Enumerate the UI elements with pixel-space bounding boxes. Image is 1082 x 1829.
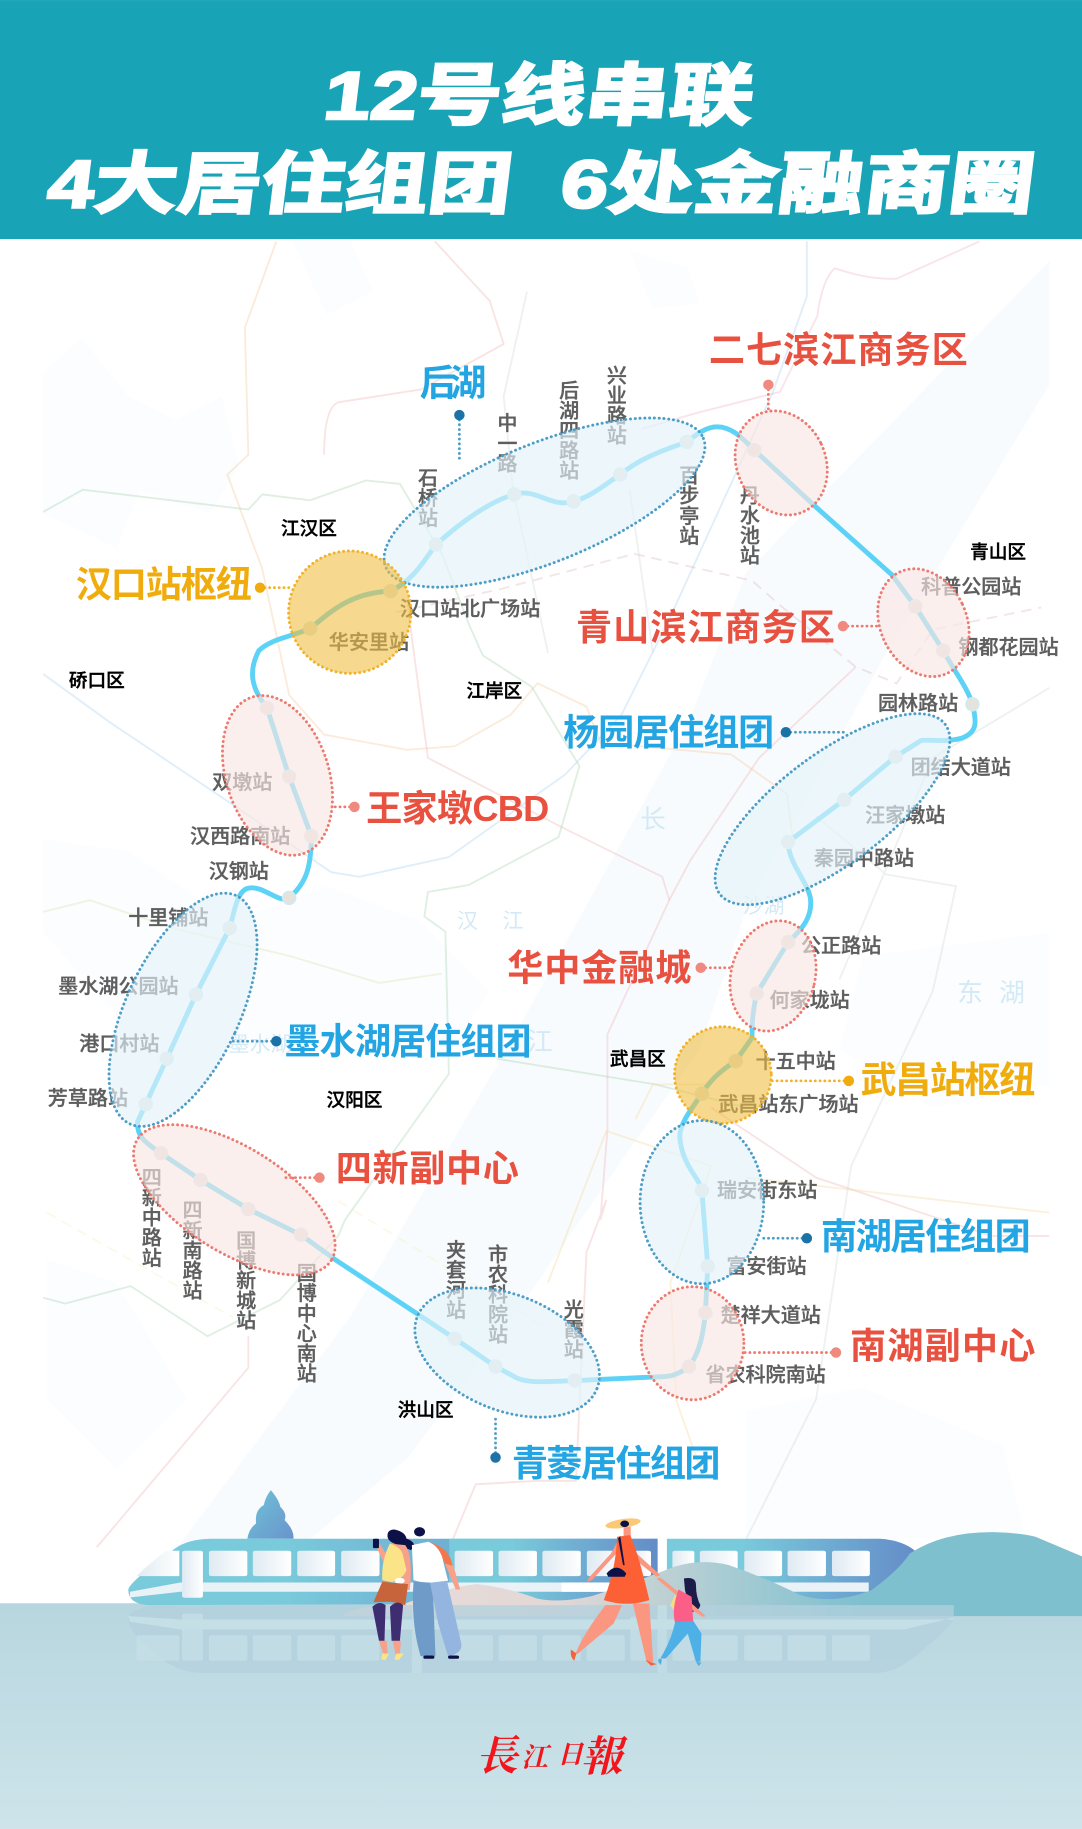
station names: 兴业路站 — [603, 364, 626, 445]
river and lake labels: 江 — [527, 1028, 553, 1057]
station names: 汪家墩站 — [865, 804, 945, 827]
station names: 后湖四路站 — [556, 380, 579, 480]
station names: 四新南路站 — [179, 1200, 202, 1300]
district names: 武昌区 — [610, 1049, 666, 1070]
callout labels: 王家墩CBD — [366, 788, 549, 829]
station names: 芳草路站 — [48, 1087, 128, 1110]
river and lake labels: 东 — [957, 979, 983, 1008]
river and lake labels: 墨水湖 — [229, 1034, 291, 1057]
station names: 武昌站东广场站 — [718, 1093, 859, 1116]
station names: 华安里站 — [329, 631, 409, 654]
background: faint base map — [0, 239, 1082, 1603]
station names: 秦园中路站 — [814, 847, 914, 870]
river and lake labels — [229, 805, 1025, 1057]
zone: Nanhu sub-centre — [641, 1287, 744, 1400]
station names — [48, 364, 1059, 1386]
zone: Sixin sub-centre — [110, 1095, 359, 1305]
callout labels: 青山滨江商务区 — [576, 607, 835, 648]
zone: Qingshan riverside business district — [861, 554, 986, 692]
zone: Houhu — [363, 383, 726, 622]
zone: Moshui Lake — [78, 872, 288, 1148]
station names: 四新中路站 — [138, 1167, 161, 1267]
person: man with bag — [412, 1527, 461, 1659]
station names: 夹套河站 — [443, 1239, 466, 1319]
river and lake labels: 湖 — [999, 980, 1025, 1008]
station names: 园林路站 — [878, 692, 958, 715]
header banner — [0, 0, 1082, 239]
station names: 十五中站 — [756, 1050, 836, 1073]
callout labels: 二七滨江商务区 — [709, 330, 968, 371]
station names: 汉钢站 — [209, 860, 269, 883]
station names: 石桥站 — [415, 467, 438, 528]
district names: 硚口区 — [69, 670, 125, 691]
station names: 港口村站 — [79, 1032, 159, 1055]
callout labels: 华中金融城 — [507, 948, 691, 989]
station names: 丹水池站 — [736, 485, 759, 565]
person: girl — [656, 1577, 706, 1666]
district names: 汉阳区 — [326, 1090, 382, 1111]
station names: 瑞安街东站 — [717, 1179, 817, 1202]
stations — [139, 436, 979, 1387]
station names: 科普公园站 — [921, 575, 1021, 598]
zone: Yangyuan — [687, 681, 978, 938]
leader dots — [255, 380, 854, 1463]
zone: Wangjiadun CBD — [203, 681, 352, 870]
callout labels: 南湖副中心 — [850, 1325, 1035, 1366]
person: woman in orange dress — [571, 1516, 660, 1666]
station names: 富安街站 — [726, 1255, 807, 1278]
river and lake labels: 江 — [503, 910, 524, 933]
train reflection — [128, 1605, 954, 1673]
zone: Qingling — [396, 1263, 619, 1442]
station names: 楚祥大道站 — [721, 1304, 821, 1327]
callout labels: 汉口站枢纽 — [76, 564, 252, 605]
callout labels: 武昌站枢纽 — [860, 1060, 1035, 1101]
title — [44, 59, 1039, 223]
station names: 墨水湖公园站 — [58, 975, 179, 998]
district names — [69, 518, 1026, 1421]
callout labels: 杨园居住组团 — [563, 712, 774, 753]
station names: 国博新城站 — [233, 1230, 256, 1330]
callout labels: 四新副中心 — [336, 1148, 519, 1189]
station names: 省农科院南站 — [705, 1363, 826, 1386]
river and lake labels: 汉 — [457, 910, 478, 933]
illustration: train, hills and passengers — [128, 1490, 1082, 1673]
metro line 12 — [137, 427, 975, 1382]
person: woman with phone — [372, 1529, 414, 1660]
zones: residential clusters, finance districts, hubs — [78, 383, 986, 1442]
station names: 中一路 — [494, 412, 517, 473]
callout labels: 青菱居住组团 — [512, 1443, 721, 1484]
zone: Nanhu — [640, 1121, 764, 1284]
district names: 洪山区 — [398, 1400, 454, 1421]
zone: Erqi riverside business district — [718, 396, 844, 530]
hills — [342, 1532, 1082, 1616]
station names: 汉西路南站 — [190, 825, 290, 848]
river and lake labels: 长 — [640, 805, 666, 834]
leader lines — [230, 385, 877, 1457]
station names: 钢都花园站 — [958, 636, 1059, 659]
train — [128, 1539, 918, 1605]
station names: 百步亭站 — [676, 465, 699, 545]
logo: Changjiang Daily: 江 — [519, 1736, 556, 1774]
station names: 汉口站北广场站 — [400, 597, 540, 620]
title: 4大居住组团 — [44, 148, 517, 223]
district names: 江岸区 — [466, 680, 522, 701]
callout labels: 南湖居住组团 — [821, 1216, 1031, 1257]
zone: Wuchang station hub — [675, 1027, 771, 1123]
station names: 何家垅站 — [770, 989, 850, 1012]
station names: 市农科院站 — [485, 1244, 508, 1344]
station names: 双墩站 — [212, 771, 272, 794]
district names: 江汉区 — [281, 518, 337, 539]
station names: 国博中心南站 — [293, 1263, 316, 1383]
zone: Hankou station hub — [289, 551, 411, 673]
callout labels: 后湖 — [420, 362, 486, 403]
logo: Changjiang Daily: 長 — [473, 1723, 529, 1783]
station names: 公正路站 — [801, 934, 881, 957]
title: 6处金融商圈 — [557, 148, 1039, 223]
water ground — [0, 1603, 1082, 1829]
station names: 光霞站 — [560, 1298, 583, 1359]
callout labels: 墨水湖居住组团 — [284, 1021, 532, 1062]
district names: 青山区 — [970, 542, 1026, 563]
station names: 十里铺站 — [128, 906, 208, 929]
river and lake labels: 沙湖 — [743, 895, 785, 918]
logo: Changjiang Daily — [473, 1723, 634, 1784]
station names: 团结大道站 — [911, 756, 1011, 779]
title: 12号线串联 — [320, 59, 758, 134]
zone: Central China finance city — [718, 911, 828, 1041]
logo: Changjiang Daily: 報 — [577, 1724, 634, 1784]
icon: tree — [247, 1490, 294, 1539]
callout labels — [76, 330, 1035, 1484]
logo: Changjiang Daily: 日 — [555, 1734, 590, 1771]
